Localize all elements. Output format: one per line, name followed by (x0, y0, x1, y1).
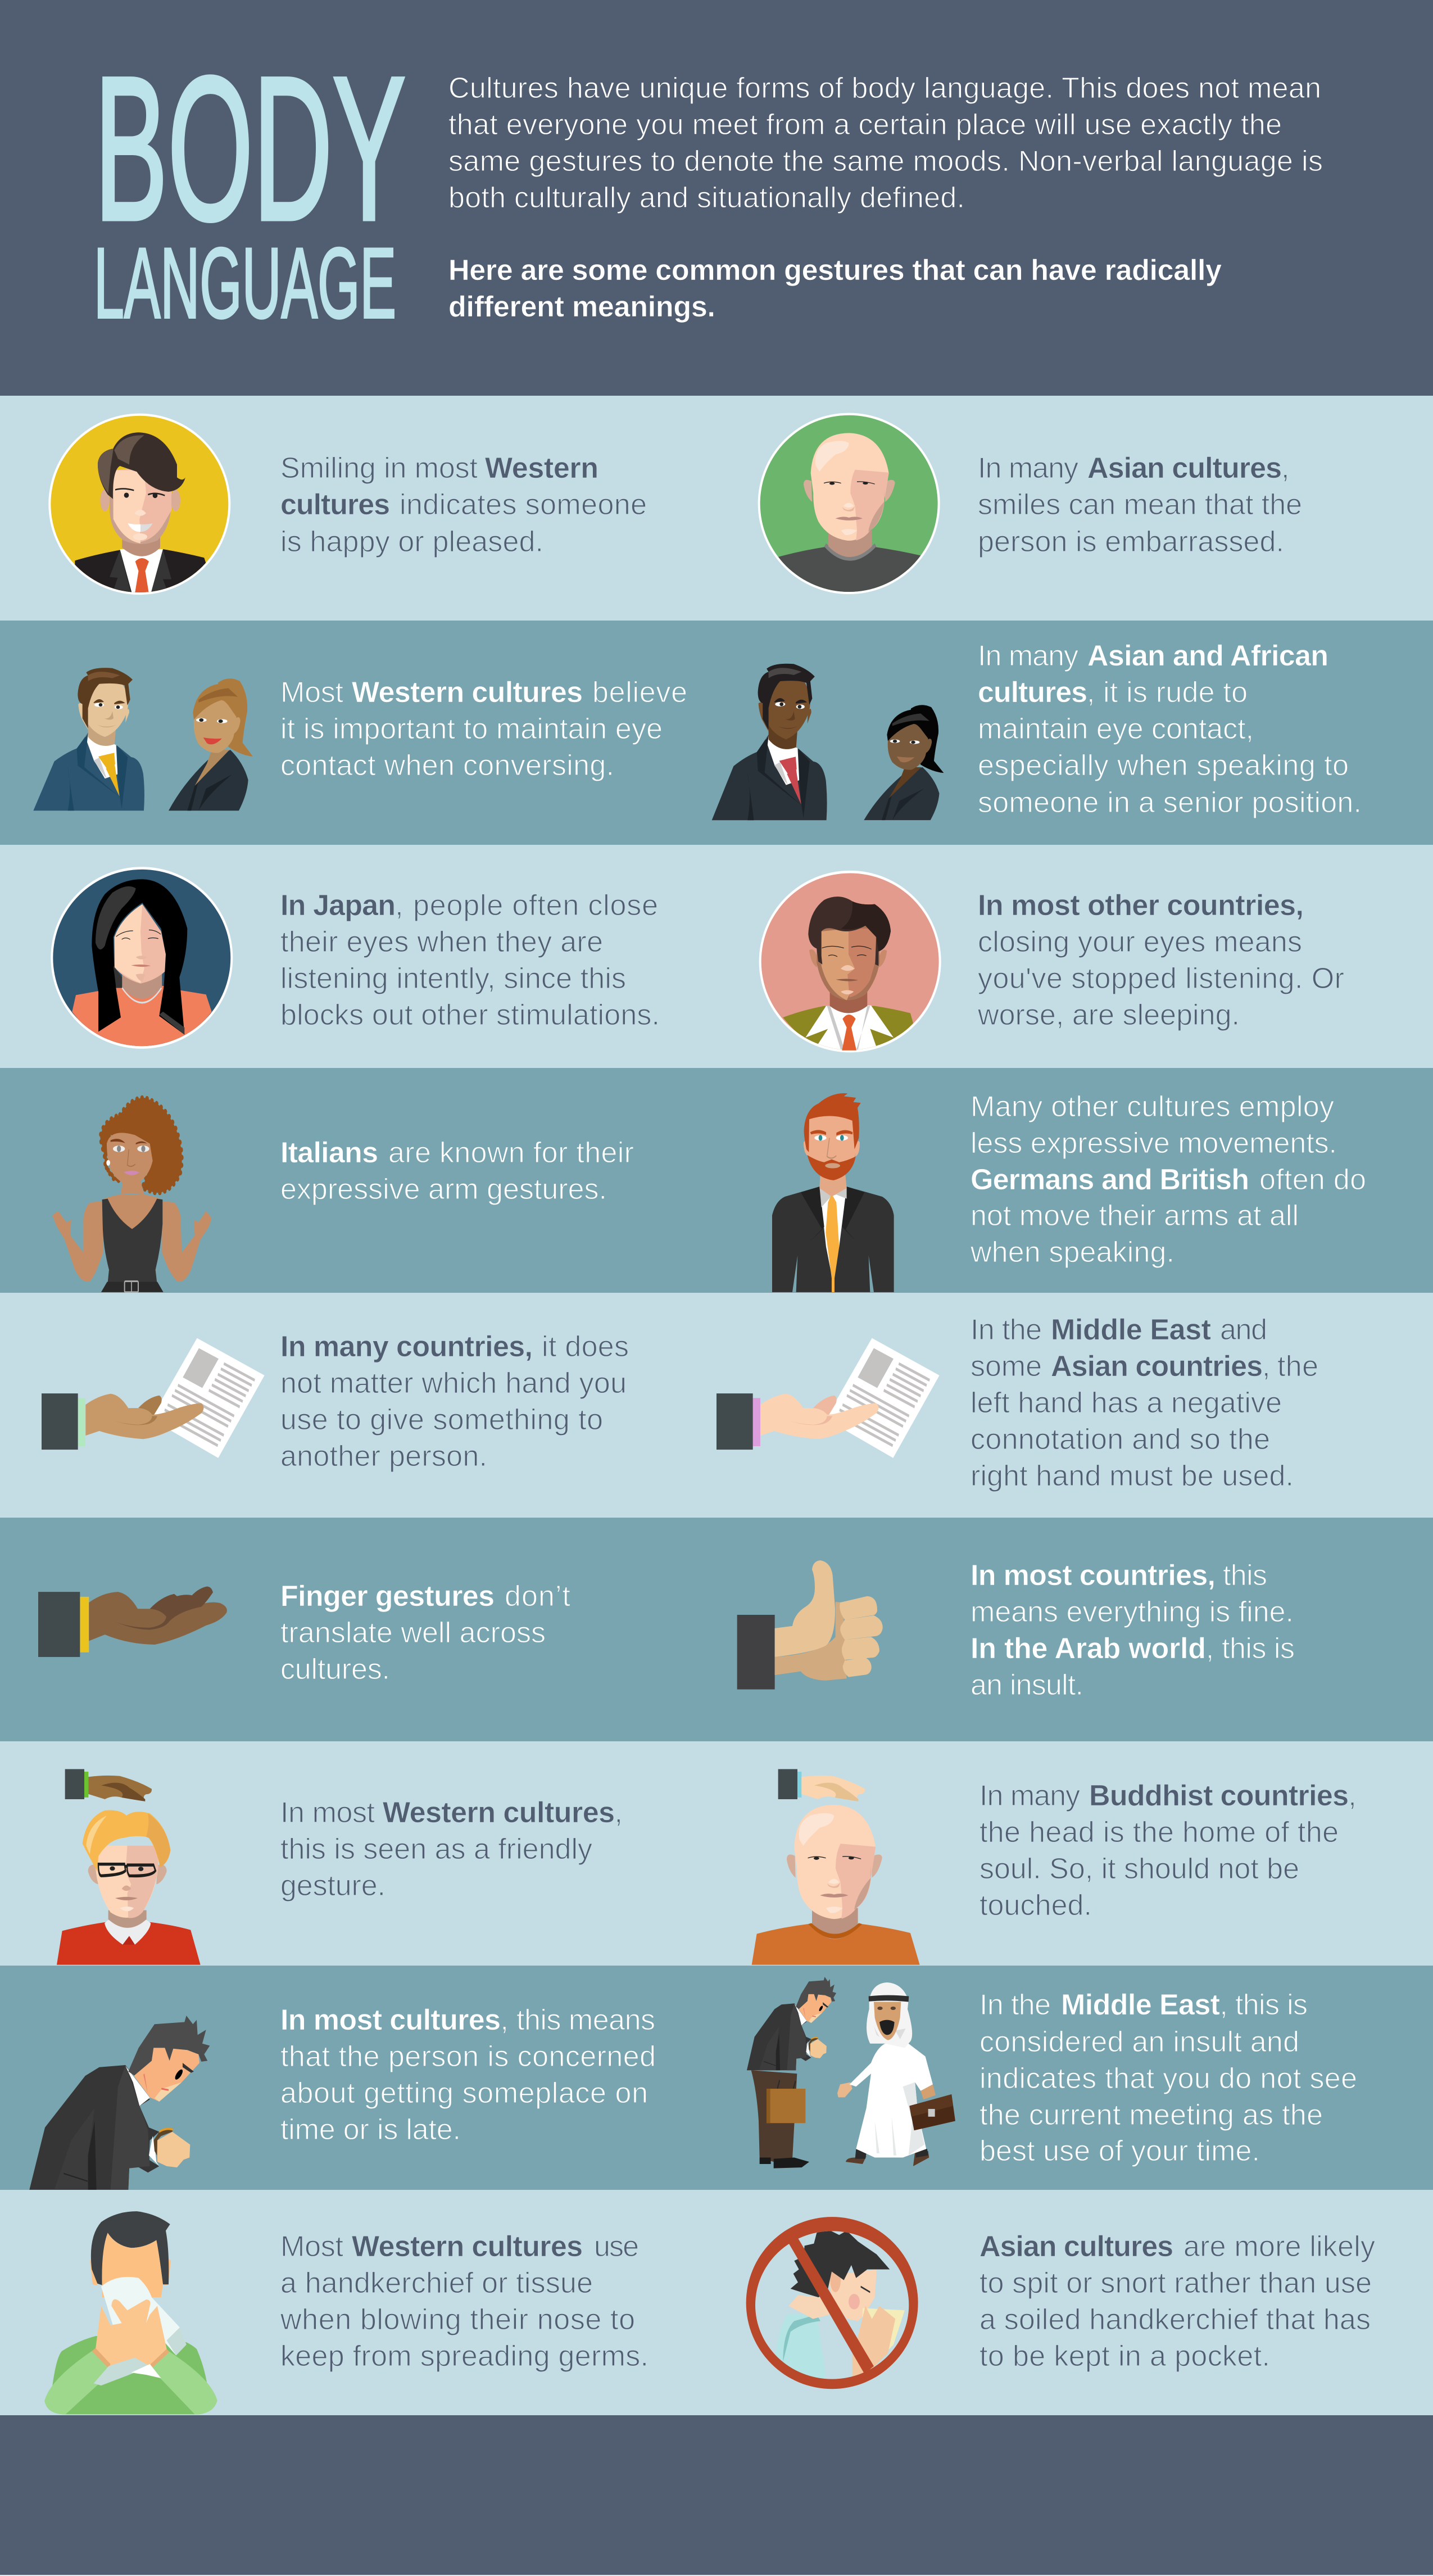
icon: bald man portrait (758, 413, 940, 596)
text: many countries hand (280, 1330, 629, 1473)
icon: prohibited man with handkerchief (746, 2217, 918, 2389)
text: middle east hand (971, 1314, 1318, 1492)
text: closed eyes other countries: you've stopped listening. Or (978, 962, 1344, 995)
text: closed eyes japan (280, 889, 660, 1031)
text: nose asian: are more likely (1183, 2230, 1375, 2263)
text: head buddhist: , (1348, 1780, 1357, 1812)
text: closed eyes japan: listening intently, since this (280, 962, 626, 995)
text: head western: this is seen as a friendly (280, 1833, 592, 1866)
text: eye contact asian african (978, 640, 1362, 819)
text: eye contact asian african: Asian and African (1087, 640, 1328, 672)
text: watch most cultures: about getting someplace on (280, 2077, 648, 2109)
text: middle east hand: the (1277, 1350, 1318, 1383)
panel: checking watch (0, 1966, 1433, 2190)
panel: smiling (0, 396, 1433, 621)
intro paragraph: Cultures have unique forms of body language. This does not mean (448, 72, 1321, 105)
text: watch most cultures: that the person is concerned (280, 2040, 656, 2073)
text: watch middle east (979, 1989, 1357, 2167)
icon: western couple (33, 668, 253, 811)
text: arm gestures italians: expressive arm gestures. (280, 1173, 607, 1206)
icon: bald head (787, 1805, 882, 1919)
text: thumbs up meaning: In the Arab world (971, 1632, 1206, 1665)
text: head western (280, 1796, 623, 1902)
text: smiling asian: Asian cultures (1087, 452, 1282, 485)
text: head western: gesture. (280, 1869, 386, 1902)
text: head western: , (614, 1796, 623, 1829)
text: nose asian (979, 2230, 1375, 2373)
text: nose western: Most (280, 2230, 344, 2263)
intro bold statement (448, 254, 1222, 323)
text: closed eyes other countries (977, 889, 1344, 1031)
text: arm gestures germans british: not move their arms at all (971, 1199, 1299, 1232)
icon: bald man torso (752, 1908, 920, 1965)
text: eye contact asian african: someone in a senior position. (978, 786, 1362, 819)
text: arm gestures germans british: Germans and British (971, 1163, 1249, 1196)
panel: giving with hands (0, 1293, 1433, 1518)
text: eye contact western: contact when conversing. (280, 749, 614, 782)
panel: eye contact (0, 621, 1433, 845)
text: watch middle east: best use of your time. (979, 2135, 1260, 2167)
title: BODY LANGUAGE (94, 34, 406, 339)
text: many countries hand: In many countries, (280, 1330, 533, 1363)
text: smiling western: indicates someone (400, 488, 647, 521)
icon: bald man with hand on head (752, 1769, 920, 1965)
text: arm gestures germans british: often do (1259, 1163, 1366, 1196)
icon: smiling man portrait (48, 414, 230, 596)
icon: pale hand holding paper (717, 1338, 940, 1458)
text: head buddhist: touched. (979, 1889, 1092, 1922)
text: watch most cultures (280, 2004, 656, 2146)
text: eye contact asian african: maintain eye contact, (978, 713, 1254, 745)
panel: touching head (0, 1741, 1433, 1966)
intro paragraph: both culturally and situationally defined. (448, 182, 965, 214)
text: closed eyes japan: , (395, 889, 403, 922)
text: finger gestures: Finger gestures (280, 1580, 495, 1613)
text: finger gestures (280, 1580, 571, 1686)
text: smiling western: cultures (280, 488, 390, 521)
text: many countries hand: it does (542, 1330, 629, 1363)
panel: finger gestures (0, 1518, 1433, 1741)
icon: tan hand holding paper (42, 1338, 265, 1458)
icon: asian and african couple (712, 664, 944, 820)
text: middle east hand: , (1262, 1350, 1271, 1383)
text: eye contact western: believe (592, 676, 687, 709)
text: nose asian: to be kept in a pocket. (979, 2340, 1270, 2373)
text: watch middle east: , (1219, 1989, 1228, 2021)
intro paragraph: that everyone you meet from a certain place will use exactly the (448, 108, 1282, 141)
text: watch middle east: In the (979, 1989, 1051, 2021)
text: middle east hand: Asian countries (1051, 1350, 1263, 1383)
text: closed eyes japan: their eyes when they are (280, 926, 603, 958)
text: arm gestures germans british (970, 1090, 1366, 1269)
icon: thumbs up (737, 1560, 883, 1690)
text: thumbs up meaning: In most countries, (971, 1559, 1216, 1592)
text: thumbs up meaning: an insult. (971, 1669, 1083, 1701)
text: finger gestures: don’t (505, 1580, 571, 1613)
icon: hand above head (778, 1769, 865, 1801)
text: many countries hand: use to give something to (280, 1404, 603, 1436)
text: smiling asian: person is embarrassed. (978, 526, 1284, 558)
text: closed eyes japan: people often close (413, 889, 658, 922)
text: many countries hand: another person. (280, 1440, 487, 1473)
text: eye contact asian african: In many (978, 640, 1078, 672)
text: thumbs up meaning (971, 1559, 1295, 1701)
intro bold statement: different meanings. (448, 291, 715, 323)
panel: closed eyes (0, 845, 1433, 1068)
text: watch middle east: considered an insult and (979, 2026, 1299, 2058)
text: smiling western (280, 452, 647, 558)
text: arm gestures italians: are known for their (388, 1137, 634, 1169)
text: watch most cultures: time or is late. (280, 2113, 461, 2146)
text: eye contact asian african: cultures (978, 676, 1087, 709)
text: nose asian: Asian cultures (979, 2230, 1173, 2263)
text: nose western: keep from spreading germs. (280, 2340, 649, 2373)
text: many countries hand: not matter which hand you (280, 1367, 627, 1400)
text: middle east hand: In the (971, 1314, 1042, 1346)
text: watch middle east: indicates that you do not see (979, 2062, 1357, 2095)
text: finger gestures: translate well across (280, 1617, 546, 1649)
icon: man portrait with closed eyes (759, 871, 941, 1054)
text: smiling asian: smiles can mean that the (978, 488, 1302, 521)
text: arm gestures italians (280, 1137, 634, 1206)
text: closed eyes other countries: worse, are sleeping. (977, 999, 1240, 1031)
text: smiling asian: In many (978, 452, 1078, 485)
text: eye contact asian african: it is rude to (1103, 676, 1248, 709)
text: head buddhist: In many (979, 1780, 1080, 1812)
text: nose western: Western cultures (352, 2230, 583, 2263)
text: watch middle east: Middle East (1061, 1989, 1220, 2021)
text: middle east hand: connotation and so the (971, 1423, 1270, 1456)
text: watch most cultures: In most cultures (280, 2004, 501, 2036)
icon: blond man with hand on head (57, 1769, 201, 1965)
text: smiling western: Smiling in most (280, 452, 478, 485)
text: head buddhist: the head is the home of the (979, 1816, 1339, 1849)
icon: japanese woman portrait (51, 867, 233, 1049)
intro paragraph: same gestures to denote the same moods. Non-verbal language is (448, 145, 1323, 178)
text: closed eyes other countries: In most other countries, (978, 889, 1304, 922)
text: watch middle east: this is (1235, 1989, 1308, 2021)
text: middle east hand: left hand has a negative (971, 1387, 1282, 1419)
icon: red bearded man in suit (772, 1093, 894, 1292)
text: arm gestures germans british: less expressive movements. (971, 1127, 1337, 1160)
text: arm gestures italians: Italians (280, 1137, 378, 1169)
text: watch most cultures: this means (516, 2004, 655, 2036)
panel: arm gestures (0, 1068, 1433, 1293)
text: middle east hand: right hand must be used. (971, 1460, 1294, 1492)
text: eye contact western: it is important to maintain eye (280, 713, 663, 745)
text: nose asian: to spit or snort rather than use (979, 2267, 1372, 2299)
text: watch middle east: the current meeting as the (979, 2099, 1323, 2131)
text: head buddhist (979, 1780, 1357, 1922)
text: arm gestures germans british: Many other cultures employ (971, 1090, 1334, 1123)
panel: blowing nose (0, 2190, 1433, 2415)
text: closed eyes japan: In Japan (280, 889, 396, 922)
text: eye contact asian african: especially when speaking to (978, 749, 1349, 782)
text: nose asian: a soiled handkerchief that has (979, 2303, 1371, 2336)
text: head western: In most (280, 1796, 375, 1829)
text: closed eyes japan: blocks out other stimulations. (280, 999, 660, 1031)
title: BODY LANGUAGE: BODY (94, 34, 406, 263)
text: closed eyes other countries: closing your eyes means (978, 926, 1302, 958)
text: thumbs up meaning: means everything is fine. (971, 1596, 1294, 1628)
text: middle east hand: some (971, 1350, 1042, 1383)
icon: man blowing nose (44, 2211, 217, 2414)
intro bold statement: Here are some common gestures that can have radically (448, 254, 1222, 287)
text: nose western: use (594, 2230, 639, 2263)
text: eye contact western: Most (280, 676, 344, 709)
text: smiling western: is happy or pleased. (280, 526, 543, 558)
text: nose western (280, 2230, 649, 2373)
icon: italian woman gesturing (52, 1098, 212, 1292)
title: BODY LANGUAGE: LANGUAGE (94, 227, 396, 339)
text: nose western: when blowing their nose to (280, 2303, 635, 2336)
text: thumbs up meaning: , (1206, 1632, 1214, 1665)
text: smiling western: Western (485, 452, 598, 485)
text: watch most cultures: , (500, 2004, 509, 2036)
text: eye contact western: Western cultures (352, 676, 583, 709)
intro paragraph (448, 72, 1323, 214)
text: eye contact western (280, 676, 687, 782)
text: head western: Western cultures (383, 1796, 615, 1829)
text: thumbs up meaning: this (1223, 1559, 1267, 1592)
text: thumbs up meaning: this is (1222, 1632, 1295, 1665)
text: eye contact asian african: , (1087, 676, 1095, 709)
icon: businessman and arab man (747, 1977, 955, 2168)
text: finger gestures: cultures. (280, 1653, 390, 1686)
icon: dark hand gesturing (38, 1586, 227, 1657)
icon: man checking watch (29, 2016, 210, 2190)
text: smiling asian: , (1281, 452, 1289, 485)
text: smiling asian (978, 452, 1302, 558)
text: arm gestures germans british: when speaking. (970, 1236, 1174, 1269)
text: middle east hand: Middle East (1051, 1314, 1211, 1346)
text: middle east hand: and (1220, 1314, 1267, 1346)
text: nose western: a handkerchief or tissue (280, 2267, 593, 2299)
text: head buddhist: soul. So, it should not be (979, 1853, 1299, 1885)
text: head buddhist: Buddhist countries (1089, 1780, 1349, 1812)
